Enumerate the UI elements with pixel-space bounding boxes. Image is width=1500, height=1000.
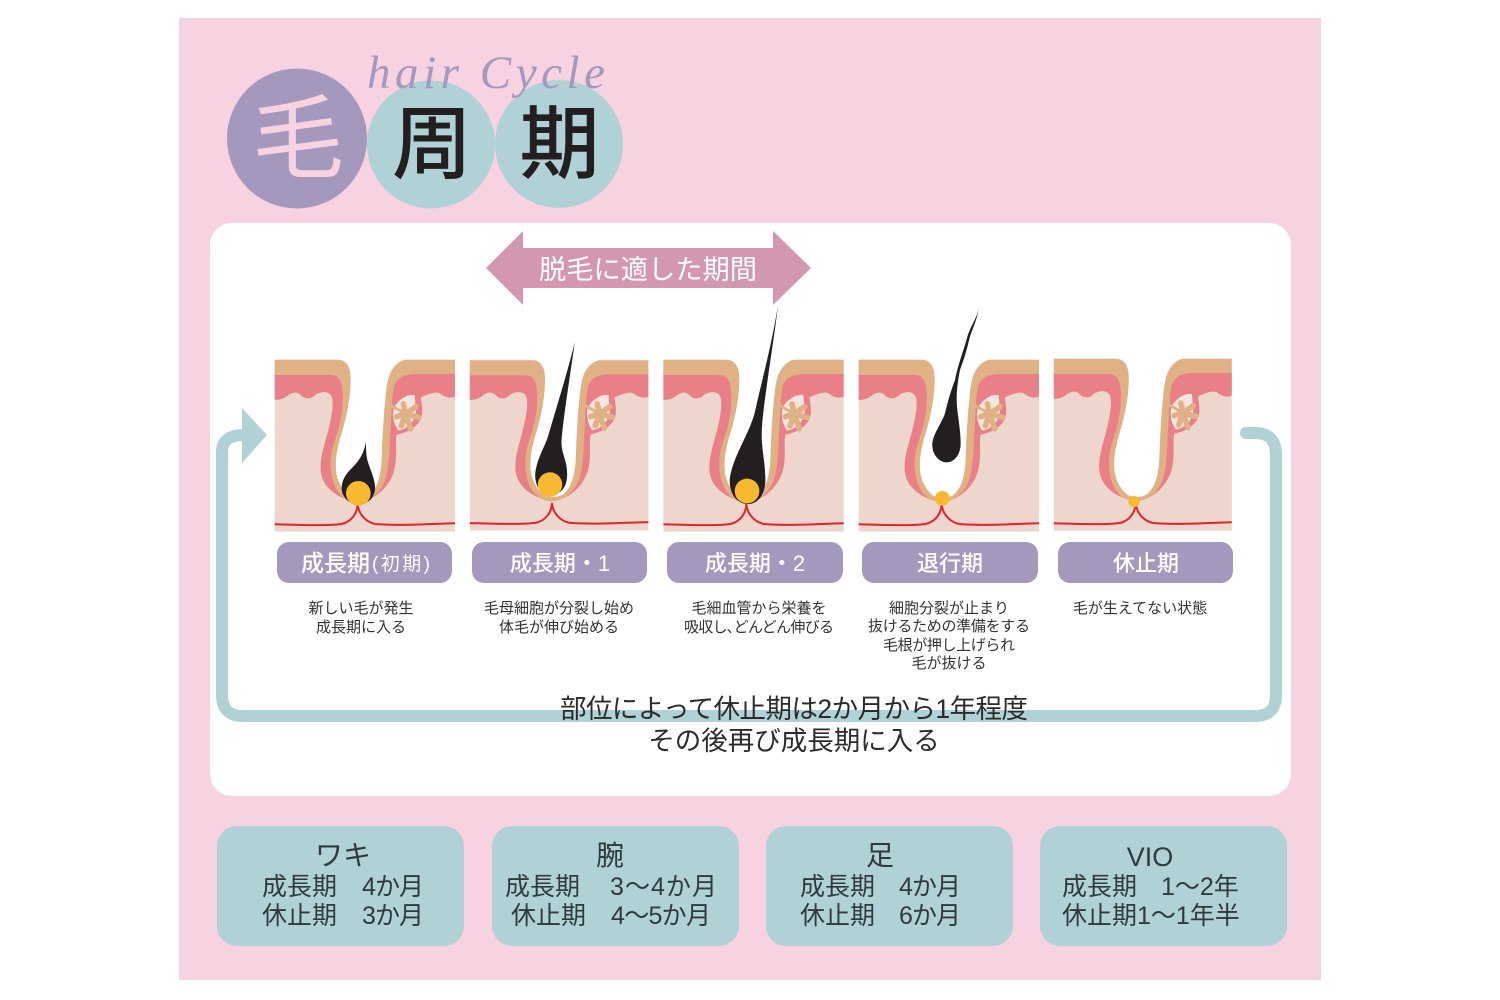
stage: 成長期・1: 成長期・1 <box>510 551 610 576</box>
description: anagen 2: 吸収し､どんどん伸びる <box>684 619 834 636</box>
description: catagen: 毛根が押し上げられ <box>883 637 1015 654</box>
title circle: 毛 <box>227 68 367 208</box>
card: 腕: 4～5か月 <box>611 902 711 930</box>
diagram: anagen 2 follicle <box>663 305 844 532</box>
title: 毛周期 hair cycle <box>227 47 623 208</box>
stage: 退行期: 退行期 <box>917 551 983 576</box>
description: catagen: 抜けるための準備をする <box>868 618 1030 635</box>
diagram: early anagen follicle <box>275 355 455 532</box>
card: VIO: 休止期1～1年半 <box>1062 902 1240 930</box>
pink background panel <box>179 18 1321 980</box>
card: 腕 <box>492 826 739 946</box>
card: 腕: 休止期 <box>511 902 586 930</box>
diagram: catagen follicle <box>859 305 1039 532</box>
hair bulb <box>735 479 759 503</box>
note: telogen duration: 部位によって休止期は2か月から1年程度 <box>560 694 1028 724</box>
card: VIO <box>1040 826 1287 946</box>
title circle: 周 <box>367 80 495 208</box>
card: 足: 4か月 <box>899 873 961 901</box>
title circle: 毛: 毛 <box>252 89 344 191</box>
card: ワキ <box>217 826 464 946</box>
description: early anagen: 成長期に入る <box>316 619 406 636</box>
card: 足 <box>766 826 1013 946</box>
card: 腕: 3～4か月 <box>610 873 717 901</box>
stage: 成長期（初期）: 成長期 <box>301 550 370 576</box>
stage: 成長期・2: 成長期・2 <box>705 551 805 576</box>
description: catagen: 毛が抜ける <box>911 655 987 672</box>
description: anagen 1 <box>484 600 634 636</box>
title script: hair cycle: hair Cycle <box>367 47 605 99</box>
card: VIO: 成長期 <box>1062 873 1137 901</box>
description: early anagen: 新しい毛が発生 <box>308 600 414 617</box>
description: anagen 2 <box>684 599 834 636</box>
card: 腕: 成長期 <box>505 873 580 901</box>
description: anagen 1: 体毛が伸び始める <box>499 619 619 636</box>
hair: anagen 1 <box>535 342 575 495</box>
card: 腕: 腕 <box>596 840 624 871</box>
description: anagen 2: 毛細血管から栄養を <box>691 599 827 617</box>
stage: 成長期・1 <box>472 542 647 583</box>
note: telogen duration <box>560 694 1028 756</box>
hair bulb <box>538 472 562 497</box>
card: 足: 足 <box>866 840 894 871</box>
diagram: anagen 1 follicle <box>470 342 648 530</box>
card: VIO: VIO <box>1127 842 1173 872</box>
diagram: telogen follicle <box>1054 354 1232 531</box>
description: anagen 1: 毛母細胞が分裂し始め <box>484 600 634 617</box>
hair bulb <box>346 481 371 506</box>
arrow: cycle loop <box>222 408 1276 716</box>
stage: 休止期 <box>1058 542 1233 583</box>
hair: catagen <box>932 305 979 462</box>
card: ワキ: 成長期 <box>262 873 337 901</box>
card: ワキ: ワキ <box>315 840 371 871</box>
description: telogen: 毛が生えてない状態 <box>1073 600 1207 617</box>
stage: 成長期・2 <box>667 542 843 583</box>
description: catagen <box>868 600 1030 672</box>
description: early anagen <box>308 600 414 636</box>
description: catagen: 細胞分裂が止まり <box>889 600 1009 617</box>
card: ワキ: 4か月 <box>362 873 424 901</box>
dermal papilla <box>1128 496 1140 507</box>
title circle: 期: 期 <box>520 100 600 189</box>
card: ワキ: 休止期 <box>262 902 337 930</box>
hair: early anagen <box>342 442 375 504</box>
stage: 休止期: 休止期 <box>1113 551 1179 576</box>
title circle: 周: 周 <box>392 100 472 189</box>
card: VIO: 1～2年 <box>1161 873 1239 901</box>
stage: 成長期（初期） <box>277 542 452 583</box>
hair: anagen 2 <box>730 305 778 504</box>
card: ワキ: 3か月 <box>362 902 424 930</box>
card: 足: 休止期 <box>800 902 875 930</box>
card: 足: 6か月 <box>899 902 961 930</box>
title circle: 期 <box>495 80 623 208</box>
arrow: period suited to hair removal <box>486 231 811 305</box>
note: telogen duration: その後再び成長期に入る <box>648 726 940 756</box>
arrow: period suited to hair removal: 脱毛に適した期間 <box>539 255 757 285</box>
dermal papilla <box>935 491 950 506</box>
stage: 成長期（初期）: (初期) <box>372 553 430 575</box>
card: 足: 成長期 <box>800 873 875 901</box>
stage: 退行期 <box>862 542 1038 583</box>
white main panel <box>210 223 1291 796</box>
